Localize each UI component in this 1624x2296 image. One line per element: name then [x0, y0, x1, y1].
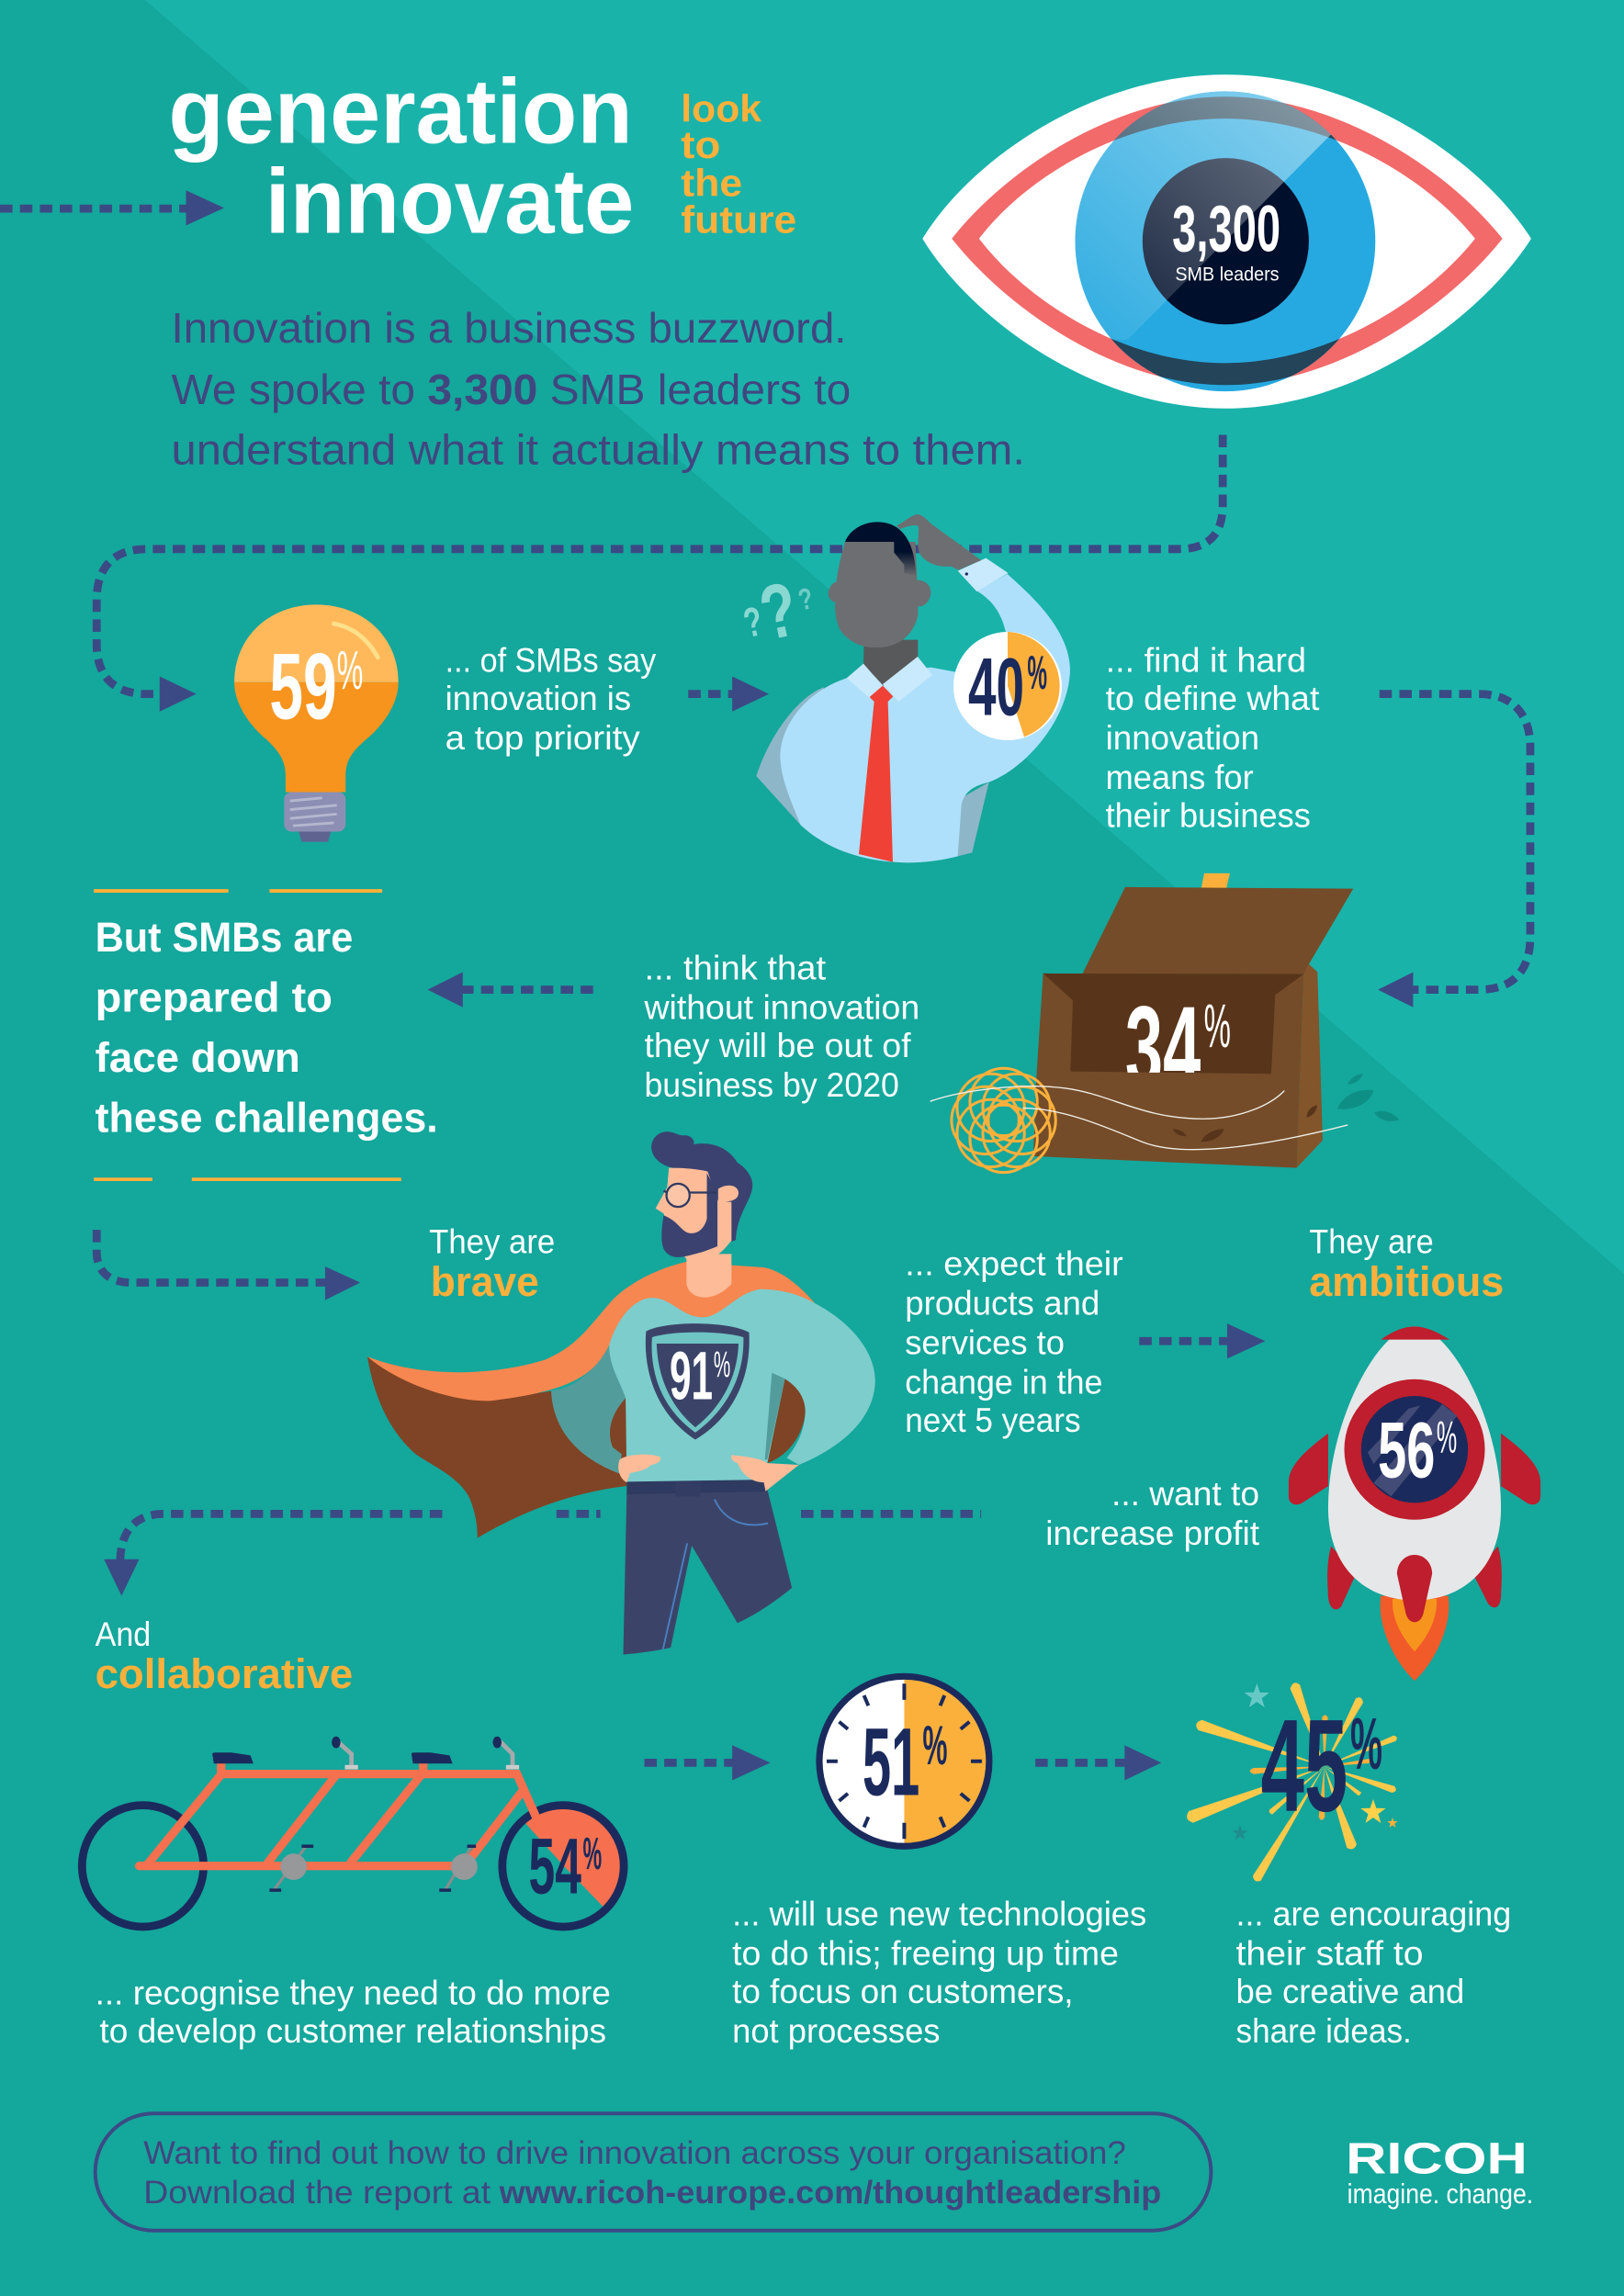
text: top priority	[445, 641, 656, 757]
label: brave	[429, 1223, 555, 1305]
text: encouraging staff: ... are encouraging	[1236, 1894, 1511, 1932]
text: hard to define: their business	[1106, 796, 1311, 835]
title: innovate	[265, 150, 634, 253]
heading: challenges: prepared to	[96, 974, 333, 1021]
illustration: confused man 40%: ?	[739, 597, 767, 647]
text: new technologies: to focus on customers,	[732, 1972, 1074, 2010]
text: top priority: innovation is	[445, 679, 631, 717]
illustration: confused man 40%: ?	[795, 580, 816, 617]
label: collaborative: And	[96, 1615, 151, 1653]
text: out of business	[643, 949, 919, 1104]
icon: burst 45%	[1187, 1683, 1398, 1881]
text: hard to define: to define what	[1106, 679, 1320, 717]
label: brave: They are	[429, 1223, 555, 1261]
text: encouraging staff: be creative and	[1236, 1972, 1464, 2010]
illustration: confused man 40%: 40	[968, 640, 1024, 732]
label: brave: brave	[431, 1258, 539, 1305]
icon: light bulb 59%	[234, 604, 399, 842]
dotted path: eye to bulb	[96, 434, 1223, 712]
text: top priority: ... of SMBs say	[445, 641, 656, 680]
logo: Ricoh	[1346, 2135, 1533, 2210]
illustration: box 34%: 34	[1125, 982, 1201, 1111]
dotted path: man to box	[1378, 694, 1530, 1007]
illustration: tandem bike 54%: %	[583, 1829, 602, 1879]
heading: challenges: But SMBs are	[96, 914, 353, 961]
arrow: bike to clock	[644, 1745, 771, 1781]
label: ambitious	[1309, 1223, 1504, 1305]
callout: download report: Download the report at	[143, 2175, 491, 2211]
icon: clock 51%: %	[922, 1714, 947, 1776]
heading: challenges: these challenges.	[96, 1094, 438, 1141]
tagline: future	[681, 197, 796, 241]
label: collaborative	[96, 1615, 353, 1697]
text: expect change: change in the	[905, 1363, 1102, 1401]
text: encouraging staff: their staff to	[1236, 1933, 1424, 1972]
text: new technologies	[732, 1894, 1146, 2050]
text: encouraging staff: share ideas.	[1236, 2011, 1412, 2050]
illustration: rocket 56%: %	[1437, 1412, 1457, 1462]
text: expect change	[905, 1244, 1123, 1439]
text: increase profit: ... want to	[1111, 1474, 1259, 1513]
heading: challenges	[94, 891, 438, 1179]
text: expect change: products and	[905, 1284, 1100, 1322]
callout: download report: Want to find out how to drive innovation across your organisation?	[143, 2135, 1126, 2171]
arrow: to challenges	[428, 973, 593, 1007]
callout: download report: www.ricoh-europe.com/thoughtleadership	[499, 2175, 1161, 2211]
title: generation	[168, 60, 633, 163]
text: hard to define	[1106, 641, 1320, 835]
icon: burst 45%: 45	[1261, 1693, 1348, 1840]
illustration: confused man 40%	[739, 514, 1070, 862]
icon: eye: SMB leaders	[1175, 263, 1280, 285]
dotted path: hero to collaborative	[104, 1514, 981, 1596]
intro text: We spoke to 3,300 SMB leaders to	[172, 366, 851, 413]
heading: challenges: face down	[96, 1034, 300, 1081]
text: customer relationships: to develop customer relationships	[99, 2011, 606, 2050]
tagline: look	[681, 86, 762, 129]
text: new technologies: not processes	[732, 2011, 940, 2050]
label: ambitious: ambitious	[1309, 1258, 1504, 1305]
illustration: confused man 40%: %	[1027, 646, 1047, 699]
text: out of business: they will be out of	[644, 1026, 911, 1064]
text: expect change: next 5 years	[905, 1401, 1081, 1439]
text: customer relationships: ... recognise they need to do more	[96, 1973, 611, 2011]
arrow: to ambitious	[1139, 1323, 1265, 1358]
illustration: box 34%	[930, 873, 1399, 1173]
illustration: tandem bike 54%	[82, 1737, 625, 1927]
illustration: box 34%: %	[1204, 993, 1231, 1061]
illustration: rocket 56%	[1289, 1326, 1540, 1681]
label: collaborative: collaborative	[96, 1650, 353, 1697]
intro text: Innovation is a business buzzword.	[172, 304, 846, 352]
text: out of business: business by 2020	[644, 1065, 899, 1104]
text: increase profit	[1045, 1474, 1260, 1552]
illustration: superhero 91%: %	[714, 1344, 730, 1385]
label: ambitious: They are	[1309, 1223, 1434, 1261]
text: hard to define: ... find it hard	[1106, 641, 1306, 680]
text: new technologies: to do this; freeing up time	[732, 1933, 1119, 1972]
icon: clock 51%	[819, 1676, 989, 1846]
icon: light bulb 59%: 59	[269, 635, 337, 739]
arrow: into title	[0, 190, 224, 226]
intro text	[172, 304, 1025, 473]
text: hard to define: means for	[1106, 758, 1254, 796]
text: out of business: without innovation	[643, 988, 919, 1027]
logo: Ricoh: imagine. change.	[1348, 2179, 1533, 2210]
icon: clock 51%: 51	[863, 1708, 919, 1816]
intro text: understand what it actually means to them.	[172, 425, 1025, 473]
tagline: the	[681, 162, 742, 205]
icon: eye	[922, 73, 1531, 409]
title	[168, 60, 634, 253]
text: increase profit: increase profit	[1045, 1514, 1260, 1552]
callout: download report	[96, 2113, 1211, 2231]
logo: Ricoh: RICOH	[1346, 2135, 1528, 2184]
arrow: clock to burst	[1035, 1745, 1161, 1781]
illustration: confused man 40%: ?	[752, 566, 805, 657]
illustration: superhero 91%	[367, 1131, 875, 1655]
text: out of business: ... think that	[644, 949, 827, 987]
tagline: to	[681, 123, 720, 166]
icon: burst 45%: %	[1350, 1703, 1382, 1784]
icon: eye: 3,300	[1172, 192, 1280, 265]
arrow: bulb to man	[688, 677, 769, 712]
text: expect change: services to	[905, 1323, 1065, 1362]
text: top priority: a top priority	[445, 718, 640, 757]
text: hard to define: innovation	[1106, 718, 1259, 757]
text: new technologies: ... will use new technologies	[732, 1894, 1146, 1932]
illustration: tandem bike 54%: 54	[529, 1822, 581, 1910]
tagline	[681, 86, 796, 241]
illustration: rocket 56%: 56	[1378, 1407, 1435, 1495]
text: encouraging staff	[1236, 1894, 1511, 2050]
dotted path: challenges to brave	[96, 1230, 360, 1300]
icon: light bulb 59%: %	[337, 641, 363, 701]
text: expect change: ... expect their	[905, 1244, 1123, 1283]
text: customer relationships	[96, 1973, 611, 2050]
illustration: superhero 91%: 91	[670, 1336, 713, 1413]
